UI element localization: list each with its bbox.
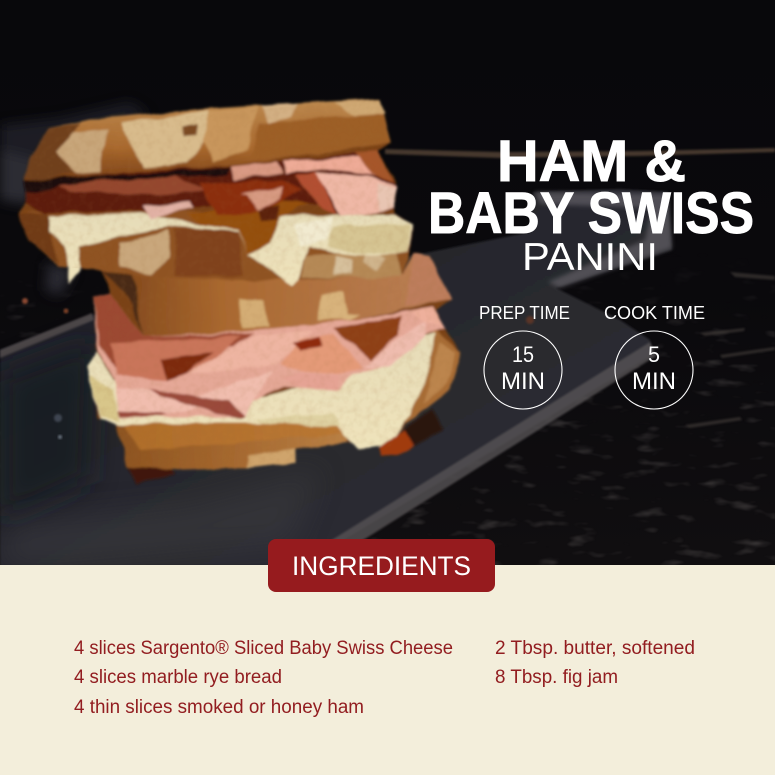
bottom slice [115, 417, 347, 470]
photo: wooden cutting board [0, 189, 672, 566]
title line: HAM &: HAM & [497, 129, 686, 194]
ingredient list right column: 8 Tbsp. fig jam [495, 667, 618, 688]
ingredients heading badge [268, 539, 495, 592]
ingredient list right column: 2 Tbsp. butter, softened [495, 638, 695, 659]
ingredient list left column: 4 slices marble rye bread [74, 667, 282, 688]
cook time value: 5 [648, 342, 660, 367]
ingredient list left column: 4 thin slices smoked or honey ham [74, 697, 364, 718]
ingredients heading badge: INGREDIENTS [292, 551, 471, 581]
prep time label: PREP TIME [479, 303, 570, 323]
board highlights [535, 192, 672, 288]
prep time unit: MIN [501, 368, 545, 395]
photo: dark table background [0, 100, 775, 565]
lower half of top sandwich bread [18, 210, 412, 280]
top ham and jam [23, 152, 397, 217]
prep time circle [484, 331, 562, 409]
cook time badge [604, 303, 705, 409]
upper cheese with drips [48, 213, 412, 287]
lower ham [92, 293, 445, 420]
ingredient list left column [74, 638, 453, 718]
cook time unit: MIN [632, 368, 676, 395]
prep time value: 15 [512, 342, 534, 367]
top bread slice [25, 98, 391, 179]
ingredient list right column [495, 638, 695, 688]
photo: stacked panini sandwich [13, 93, 467, 484]
table grain [12, 297, 775, 565]
lower cheese [87, 333, 435, 449]
cook time circle [615, 331, 693, 409]
cook time label: COOK TIME [604, 303, 705, 323]
middle bread slice [100, 253, 452, 337]
prep time badge [479, 303, 570, 409]
blurred cloth at left [0, 102, 150, 296]
panel: ingredients [0, 539, 775, 775]
flour patches on top crust [57, 130, 110, 173]
ingredient list left column: 4 slices Sargento® Sliced Baby Swiss Cheese [74, 638, 453, 659]
title [428, 129, 754, 279]
subtitle: PANINI: PANINI [522, 236, 658, 279]
blurred table streaks [385, 148, 775, 158]
jam on upper cheese [187, 202, 310, 255]
base silhouette [18, 98, 462, 468]
dark drips under sandwich [403, 408, 443, 445]
right crust of bottom slice [400, 328, 462, 423]
bread grain texture [40, 170, 432, 444]
